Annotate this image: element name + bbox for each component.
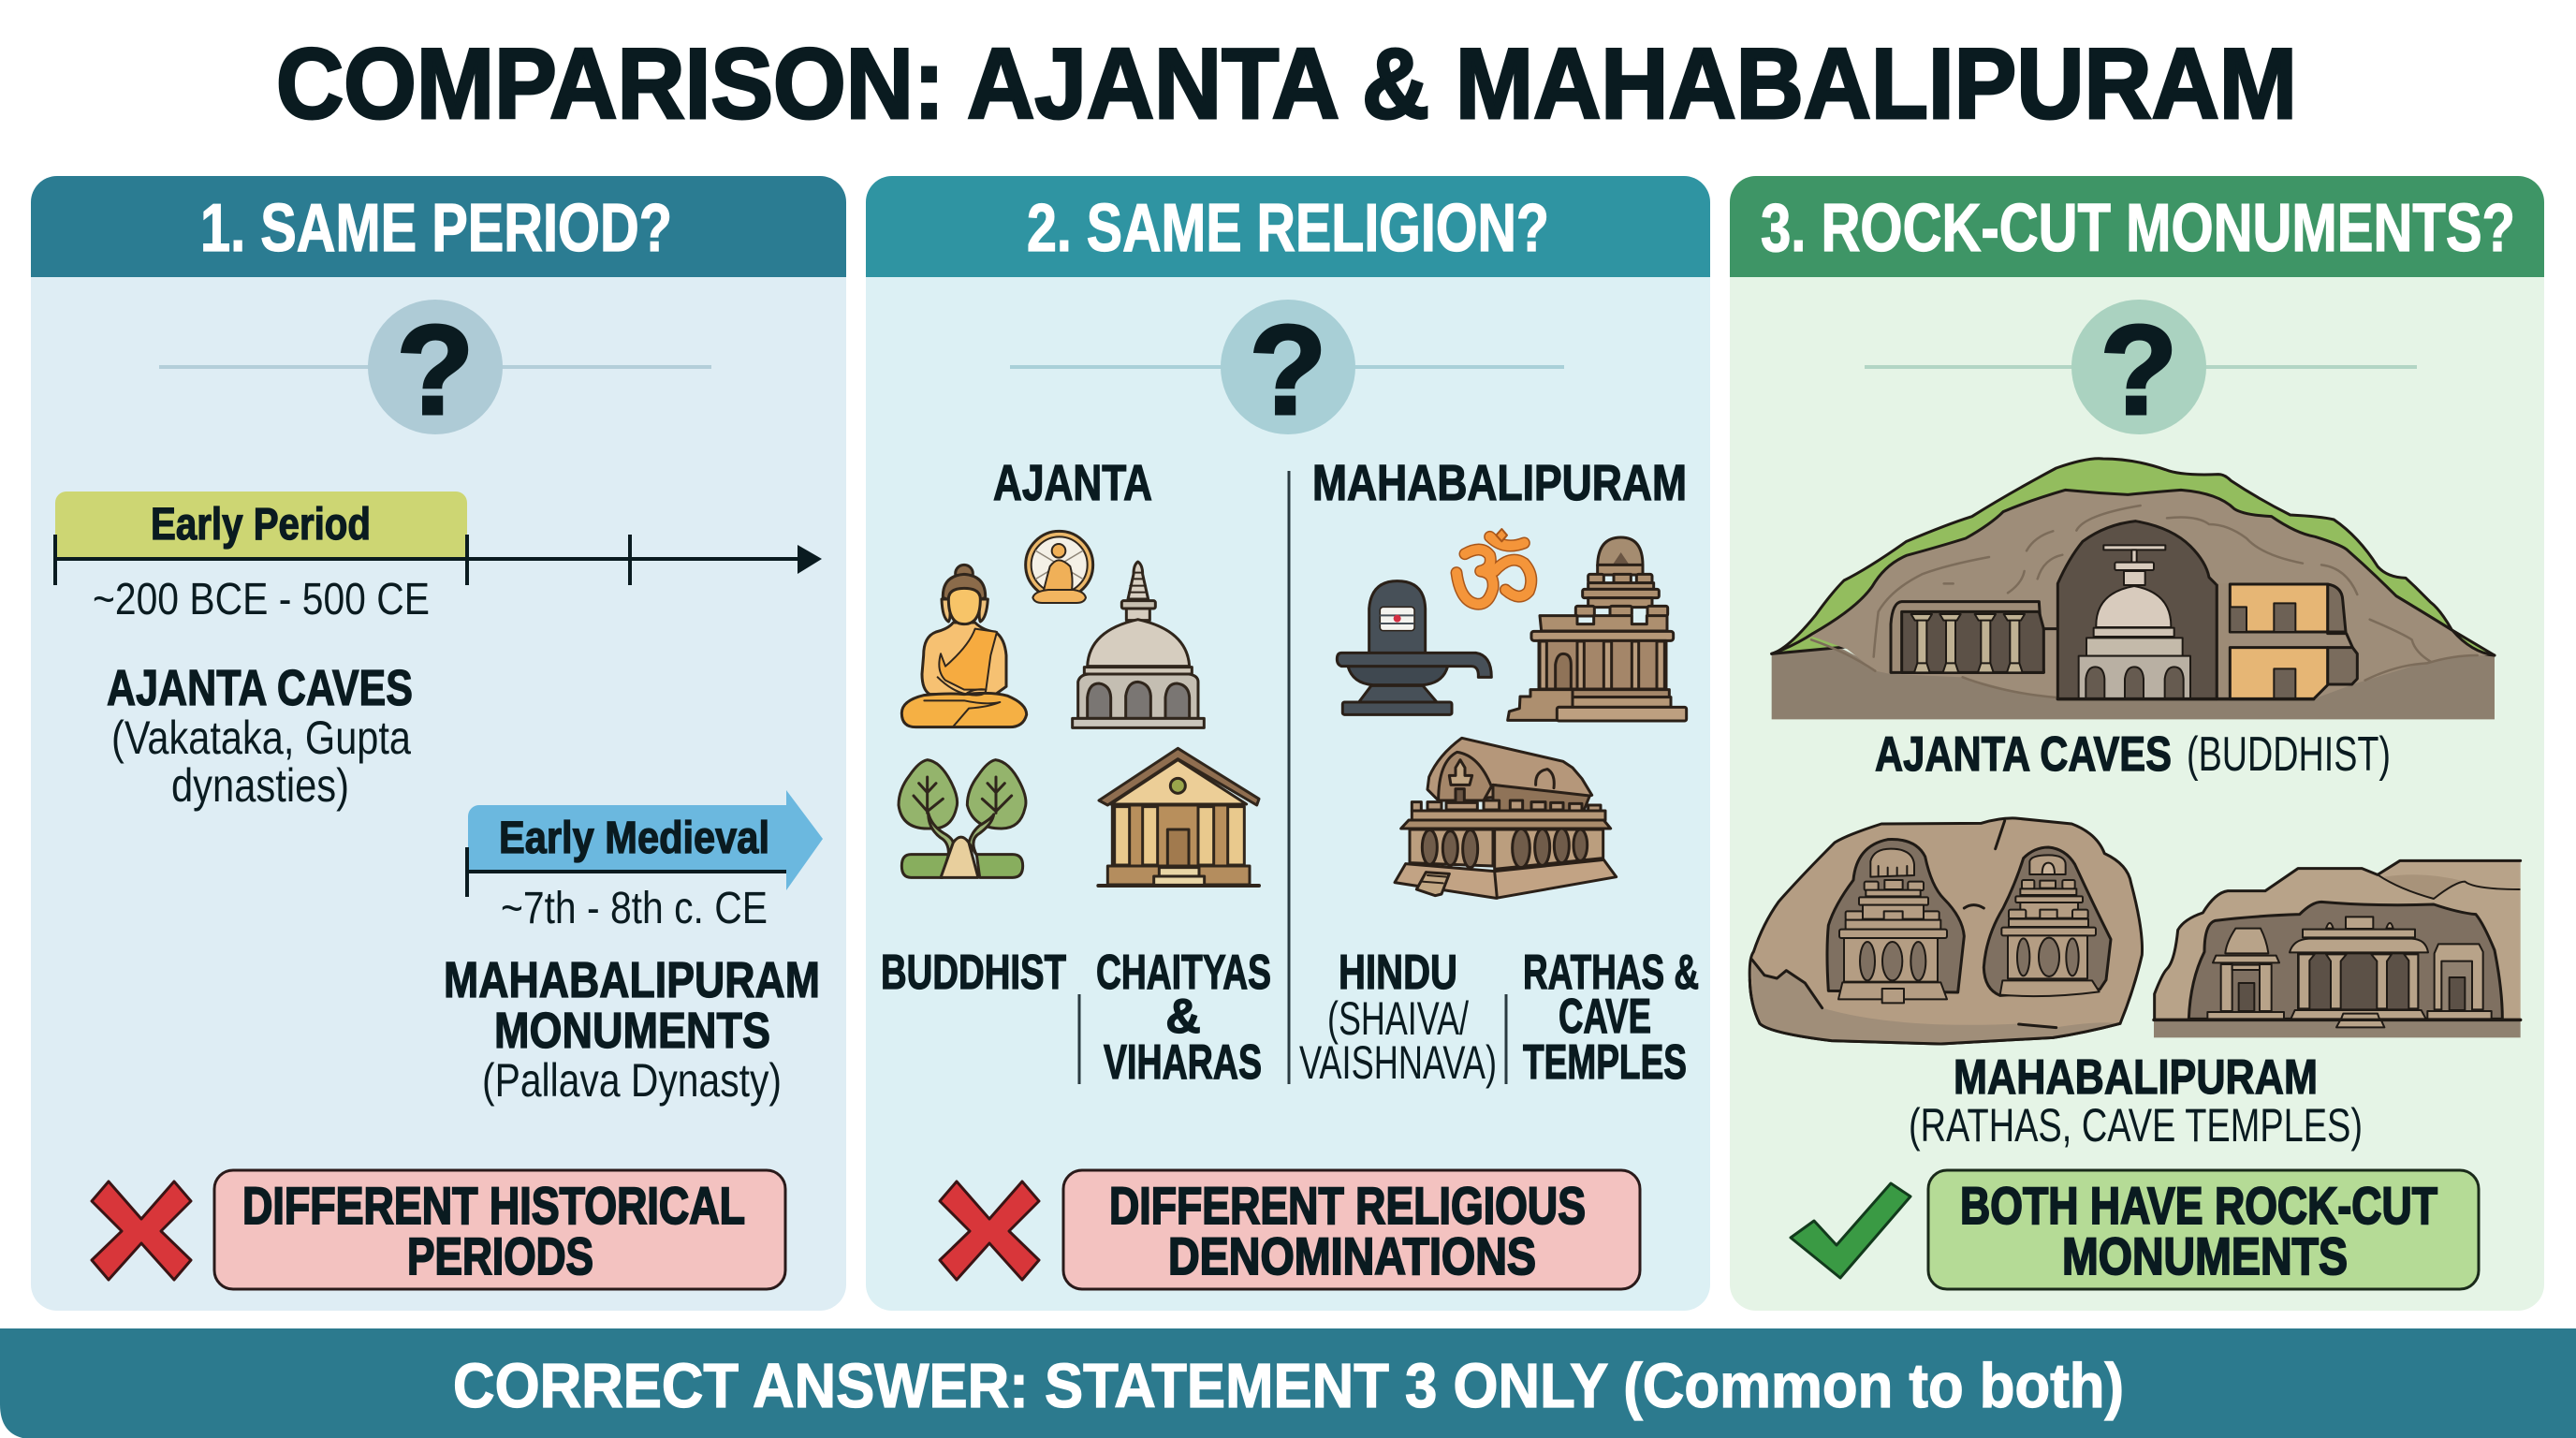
label: chaityas and viharas: VIHARAS xyxy=(1104,1035,1262,1090)
illustration: carved rathas boulder xyxy=(1749,818,2143,1044)
panel: rock-cut monuments xyxy=(1730,176,2544,1311)
answer bar xyxy=(0,1328,2576,1438)
timeline axis xyxy=(55,492,822,585)
label: rathas and cave temples: RATHAS & xyxy=(1523,946,1699,1000)
question badge: ? xyxy=(396,299,475,441)
label: hindu: (SHAIVA/ xyxy=(1327,992,1469,1045)
icon: red cross xyxy=(940,1181,1039,1280)
label: ajanta caves buddhist: AJANTA CAVES xyxy=(1875,727,2172,782)
panel: same religion xyxy=(866,176,1710,1311)
illustration: cave temples xyxy=(2154,860,2521,1037)
label: rathas and cave temples: CAVE xyxy=(1559,990,1651,1044)
header: same religion: 2. SAME RELIGION? xyxy=(1027,191,1549,266)
label: mahabalipuram rathas cave temples: MAHABALIPURAM xyxy=(1954,1050,2318,1105)
answer bar: CORRECT ANSWER: STATEMENT 3 ONLY (Common to both) xyxy=(453,1351,2124,1421)
illustration: ajanta caves xyxy=(1772,459,2495,719)
mahabalipuram monuments label: (Pallava Dynasty) xyxy=(482,1054,782,1107)
question badge: ? xyxy=(2100,299,2178,441)
label: mahabalipuram rathas cave temples xyxy=(1909,1050,2363,1152)
ajanta caves label: (Vakataka, Gupta xyxy=(111,712,411,764)
label: chaityas and viharas: & xyxy=(1165,990,1201,1044)
panel: same period xyxy=(31,176,846,1311)
icon: shiva lingam xyxy=(1337,581,1491,714)
label: buddhist: BUDDHIST xyxy=(881,946,1066,1000)
icon: small buddha in halo xyxy=(1026,531,1093,603)
mahabalipuram monuments label xyxy=(444,952,820,1107)
label: hindu: VAISHNAVA) xyxy=(1299,1036,1497,1089)
label: chaityas and viharas xyxy=(1096,946,1271,1090)
icons: buddhist illustrations xyxy=(899,531,1259,886)
column heading: mahabalipuram: MAHABALIPURAM xyxy=(1312,455,1687,511)
icons: hindu illustrations xyxy=(1337,529,1687,721)
header: same period: 1. SAME PERIOD? xyxy=(200,191,672,266)
icon: stupa xyxy=(1073,562,1204,727)
early medieval arrow xyxy=(467,790,823,897)
label: chaityas and viharas: CHAITYAS xyxy=(1096,946,1271,1000)
verdict: different denominations: DIFFERENT RELIGIOUS xyxy=(1109,1176,1586,1235)
question badge xyxy=(1010,299,1564,441)
icon: seated buddha xyxy=(901,565,1027,727)
icon: om symbol xyxy=(1456,529,1531,604)
icon: red cross xyxy=(92,1181,191,1280)
label: hindu xyxy=(1299,946,1497,1089)
ajanta caves label xyxy=(107,660,413,812)
verdict: both rock-cut: BOTH HAVE ROCK-CUT xyxy=(1960,1176,2437,1235)
label: ajanta caves buddhist: (BUDDHIST) xyxy=(2187,727,2391,782)
verdict: different denominations xyxy=(1063,1170,1640,1289)
icon: vihara temple xyxy=(1098,748,1259,886)
verdict: different periods: DIFFERENT HISTORICAL xyxy=(242,1176,745,1235)
icon: ratha temple xyxy=(1395,738,1617,898)
verdict: both rock-cut: MONUMENTS xyxy=(2062,1226,2348,1285)
early medieval dates: ~7th - 8th c. CE xyxy=(501,884,768,933)
verdict: different periods: PERIODS xyxy=(407,1226,593,1285)
verdict: different denominations: DENOMINATIONS xyxy=(1168,1226,1536,1285)
label: hindu: HINDU xyxy=(1339,946,1457,1000)
ajanta caves label: dynasties) xyxy=(171,759,349,812)
label: mahabalipuram rathas cave temples: (RATHAS, CAVE TEMPLES) xyxy=(1909,1099,2363,1152)
label: rathas and cave temples xyxy=(1523,946,1699,1090)
column heading: ajanta: AJANTA xyxy=(993,455,1152,511)
ajanta caves label: AJANTA CAVES xyxy=(107,660,413,716)
question badge xyxy=(1865,299,2417,441)
header: same period xyxy=(31,176,846,277)
early medieval arrow: Early Medieval xyxy=(499,814,769,863)
icon: green check xyxy=(1791,1183,1910,1278)
verdict: different periods xyxy=(214,1170,785,1289)
question badge xyxy=(159,299,711,441)
early period dates: ~200 BCE - 500 CE xyxy=(93,575,430,624)
verdict: both rock-cut xyxy=(1928,1170,2479,1289)
icon: shore temple xyxy=(1508,537,1687,721)
question badge: ? xyxy=(1249,299,1327,441)
mahabalipuram monuments label: MONUMENTS xyxy=(494,1003,770,1059)
header: same religion xyxy=(866,176,1710,277)
title: COMPARISON: AJANTA & MAHABALIPURAM xyxy=(276,27,2297,139)
icon: bodhi trees xyxy=(899,760,1026,877)
early period label: Early Period xyxy=(151,500,371,550)
header: rock-cut monuments xyxy=(1730,176,2544,277)
label: rathas and cave temples: TEMPLES xyxy=(1523,1035,1687,1090)
mahabalipuram monuments label: MAHABALIPURAM xyxy=(444,952,820,1008)
